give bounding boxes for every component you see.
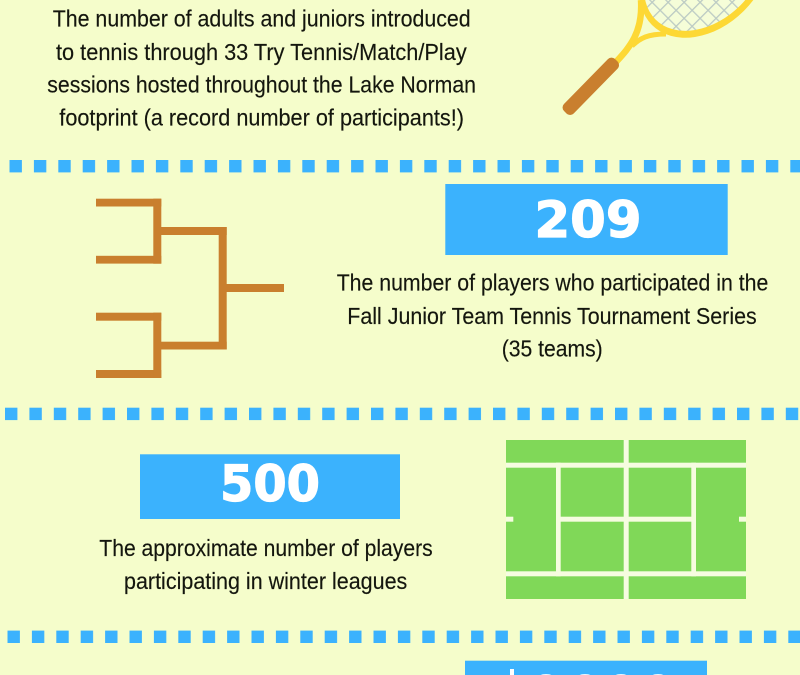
- stat box: 500: [140, 454, 400, 519]
- divider: dotted row 1: [0, 160, 800, 172]
- text block: winter leagues description: [99, 535, 433, 594]
- icon: tennis racket: [562, 0, 754, 115]
- text block: winter leagues description: participating in winter leagues: [124, 568, 407, 594]
- icon: tennis court: [506, 440, 746, 599]
- stat box: 209: 209: [534, 191, 642, 249]
- text block: try tennis description: [47, 6, 476, 130]
- text block: junior team tennis description: Fall Junior Team Tennis Tournament Series: [347, 303, 757, 329]
- text block: try tennis description: to tennis through 33 Try Tennis/Match/Play: [56, 39, 467, 65]
- text block: junior team tennis description: (35 teams): [502, 336, 603, 362]
- text block: junior team tennis description: [337, 270, 768, 362]
- divider: dotted row 3: [0, 631, 800, 643]
- stat box: bottom number, cropped: [465, 661, 707, 675]
- text block: winter leagues description: The approximate number of players: [99, 535, 433, 561]
- text block: try tennis description: sessions hosted throughout the Lake Norman: [47, 72, 476, 98]
- text block: try tennis description: The number of adults and juniors introduced: [53, 6, 471, 32]
- text block: junior team tennis description: The number of players who participated in the: [337, 270, 768, 296]
- icon: tournament bracket: [96, 199, 284, 378]
- stat box: 500: 500: [220, 455, 320, 513]
- stat box: 209: [445, 184, 728, 255]
- divider: dotted row 2: [0, 408, 800, 420]
- text block: try tennis description: footprint (a record number of participants!): [59, 104, 464, 130]
